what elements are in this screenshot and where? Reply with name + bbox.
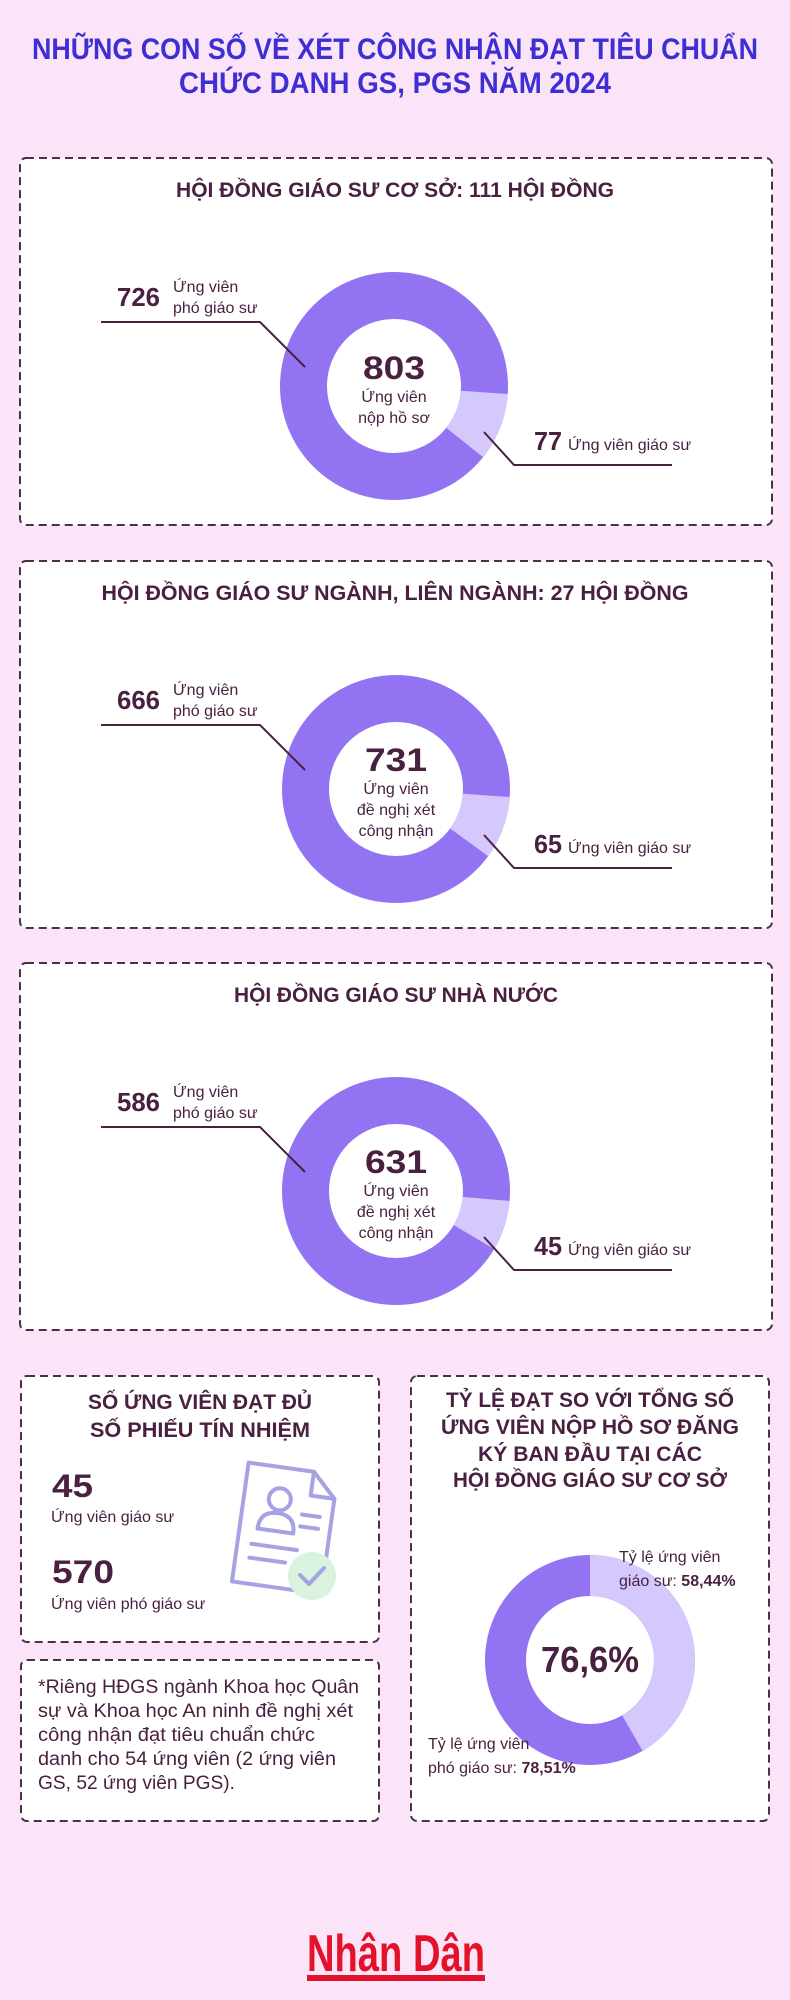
donut chart: nộp hồ sơ	[358, 410, 430, 427]
heading: KÝ BAN ĐẦU TẠI CÁC	[478, 1442, 702, 1466]
heading: HỘI ĐỒNG GIÁO SƯ CƠ SỞ: 111 HỘI ĐỒNG	[176, 178, 614, 202]
panel: note	[21, 1660, 379, 1821]
note text: sự và Khoa học An ninh đề nghị xét	[38, 1701, 354, 1722]
heading: SỐ PHIẾU TÍN NHIỆM	[90, 1418, 310, 1442]
heading: ỨNG VIÊN NỘP HỒ SƠ ĐĂNG	[441, 1415, 739, 1439]
note text: *Riêng HĐGS ngành Khoa học Quân	[38, 1677, 359, 1698]
callout: phó giáo sư: Ứng viên	[173, 680, 238, 699]
title	[32, 32, 758, 100]
callout: phó giáo sư: phó giáo sư	[173, 1105, 258, 1122]
label: giáo sư: Tỷ lệ ứng viên	[619, 1549, 720, 1566]
callout: giáo sư: Ứng viên giáo sư	[568, 435, 691, 454]
stat: 570	[51, 1554, 206, 1613]
callout: phó giáo sư	[101, 680, 305, 770]
panel: hội đồng nhà nước	[20, 963, 772, 1330]
stat: 45: 45	[52, 1468, 93, 1504]
heading: HỘI ĐỒNG GIÁO SƯ NGÀNH, LIÊN NGÀNH: 27 HỘI ĐỒNG	[102, 581, 688, 605]
label: giáo sư	[619, 1549, 736, 1590]
note text: GS, 52 ứng viên PGS).	[38, 1773, 235, 1794]
label: phó giáo sư: Tỷ lệ ứng viên	[428, 1736, 529, 1753]
stat: 45: Ứng viên giáo sư	[51, 1507, 174, 1526]
callout: giáo sư: Ứng viên giáo sư	[568, 838, 691, 857]
heading	[441, 1388, 739, 1492]
note text: danh cho 54 ứng viên (2 ứng viên	[38, 1749, 336, 1770]
label: phó giáo sư	[428, 1736, 576, 1777]
callout: giáo sư: 77	[534, 426, 562, 456]
callout: giáo sư: 65	[534, 829, 562, 859]
donut chart: Ứng viên	[363, 779, 429, 798]
stat: 570: 570	[52, 1554, 114, 1590]
heading: HỘI ĐỒNG GIÁO SƯ CƠ SỞ	[453, 1468, 727, 1492]
donut chart: 803	[363, 350, 425, 386]
donut chart: đề nghị xét	[357, 802, 436, 819]
note text	[38, 1677, 359, 1794]
donut chart	[306, 1100, 486, 1282]
callout: giáo sư	[484, 1231, 691, 1270]
panel: tỷ lệ đạt	[411, 1376, 769, 1821]
callout: phó giáo sư: phó giáo sư	[173, 703, 258, 720]
donut chart	[304, 296, 484, 476]
heading: TỶ LỆ ĐẠT SO VỚI TỔNG SỐ	[446, 1388, 734, 1412]
donut chart	[306, 698, 486, 880]
logo: Nhân Dân: Nhân Dân	[307, 1925, 485, 1983]
callout: phó giáo sư: 726	[117, 282, 160, 312]
donut chart: công nhận	[359, 1225, 433, 1242]
donut chart: 631	[365, 1144, 427, 1180]
donut chart: công nhận	[359, 823, 433, 840]
heading	[88, 1390, 312, 1442]
donut chart: đề nghị xét	[357, 1204, 436, 1221]
callout: phó giáo sư: 586	[117, 1087, 160, 1117]
callout: phó giáo sư	[101, 1082, 305, 1172]
label: giáo sư: giáo sư: 58,44%	[619, 1573, 736, 1590]
callout: phó giáo sư: phó giáo sư	[173, 300, 258, 317]
panel: số ứng viên đạt đủ phiếu	[21, 1376, 379, 1642]
callout: giáo sư	[484, 829, 691, 868]
stat: 45	[51, 1468, 174, 1526]
stat: 570: Ứng viên phó giáo sư	[51, 1594, 206, 1613]
note text: công nhận đạt tiêu chuẩn chức	[38, 1725, 315, 1746]
label: phó giáo sư: phó giáo sư: 78,51%	[428, 1760, 576, 1777]
panel: hội đồng ngành	[20, 561, 772, 928]
donut chart: Ứng viên	[361, 387, 427, 406]
callout: phó giáo sư: 666	[117, 685, 160, 715]
callout: giáo sư	[484, 426, 691, 465]
title: CHỨC DANH GS, PGS NĂM 2024	[179, 66, 611, 100]
callout: phó giáo sư: Ứng viên	[173, 1082, 238, 1101]
callout: phó giáo sư: Ứng viên	[173, 277, 238, 296]
donut chart	[506, 1576, 674, 1744]
heading: HỘI ĐỒNG GIÁO SƯ NHÀ NƯỚC	[234, 983, 558, 1007]
callout: giáo sư: Ứng viên giáo sư	[568, 1240, 691, 1259]
callout: giáo sư: 45	[534, 1231, 562, 1261]
donut chart: 731	[365, 742, 427, 778]
heading: SỐ ỨNG VIÊN ĐẠT ĐỦ	[88, 1390, 312, 1414]
donut chart: 76,6%	[541, 1639, 639, 1680]
icon: document with check	[232, 1463, 338, 1600]
donut chart: Ứng viên	[363, 1181, 429, 1200]
panel: hội đồng cơ sở	[20, 158, 772, 525]
callout: phó giáo sư	[101, 277, 305, 367]
